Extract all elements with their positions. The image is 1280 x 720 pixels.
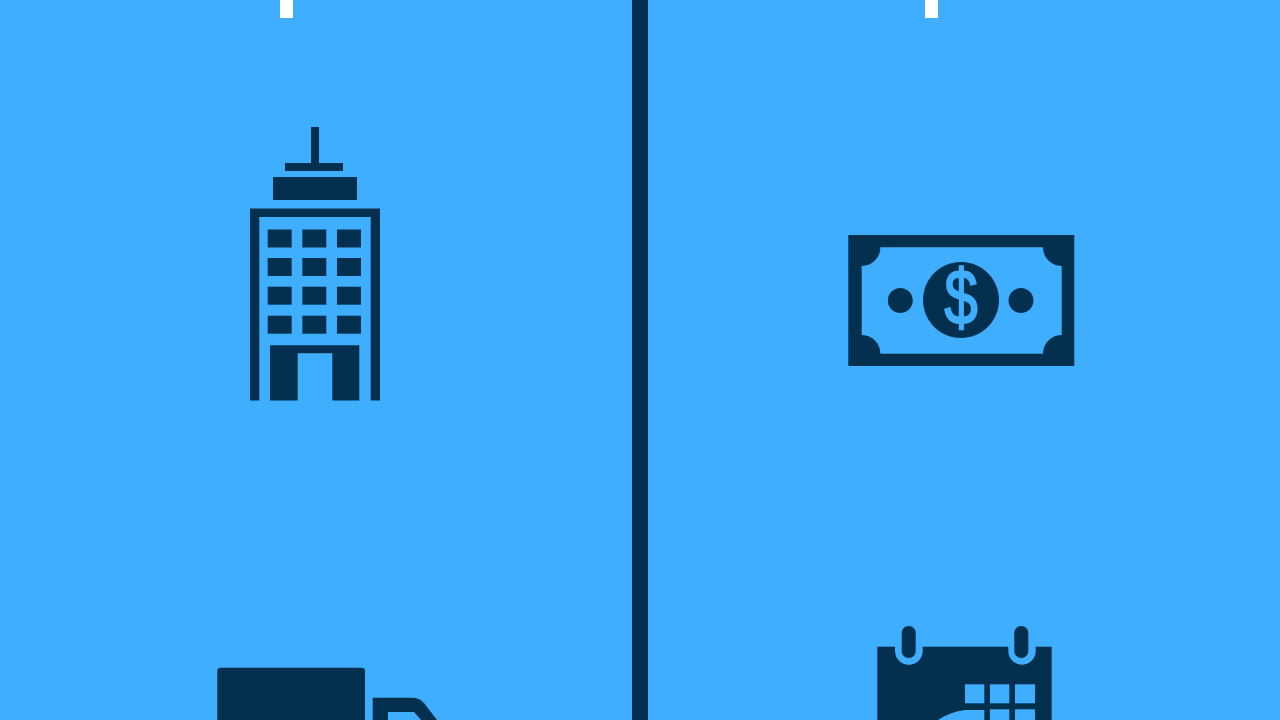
icon: calendar [877, 626, 1052, 720]
icon: dollar banknote [848, 235, 1074, 366]
icon: office building [250, 127, 380, 400]
white bar: right [925, 0, 938, 18]
centre divider [632, 0, 648, 720]
icon: delivery truck [217, 668, 437, 720]
white bar: left [280, 0, 293, 18]
icon: dollar banknote: $ [944, 253, 978, 341]
